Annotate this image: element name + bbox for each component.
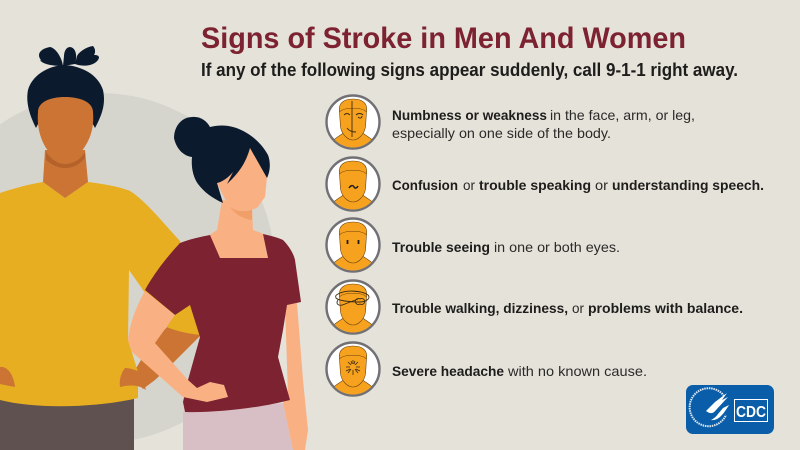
man face	[38, 97, 94, 150]
text: severe headache: with no known cause.	[507, 363, 647, 379]
woman shirt	[145, 234, 301, 412]
text: numbness: in the face, arm, or leg,	[550, 107, 695, 123]
text: confusion: understanding speech.	[612, 177, 764, 193]
icon: confusion	[326, 158, 380, 214]
text: confusion: or	[463, 177, 475, 193]
text: trouble seeing: Trouble seeing	[392, 239, 490, 255]
man neck	[43, 150, 88, 198]
subtitle: If any of the following signs appear suddenly, call 9-1-1 right away.	[201, 60, 738, 80]
text: severe headache: Severe headache	[392, 363, 504, 379]
icon: facial numbness	[326, 96, 380, 152]
woman neck	[208, 200, 268, 262]
illustration: woman	[128, 117, 308, 450]
text: numbness: especially on one side of the body.	[392, 125, 611, 141]
text: trouble seeing: in one or both eyes.	[494, 239, 620, 255]
text: confusion	[392, 177, 764, 193]
man hair	[27, 65, 104, 128]
man hair tufts	[39, 46, 99, 66]
man trousers	[0, 398, 134, 450]
man shirt	[0, 182, 201, 406]
man forearm	[132, 327, 201, 389]
woman hair	[174, 117, 270, 203]
text: trouble walking: problems with balance.	[588, 300, 743, 316]
icon: trouble seeing	[326, 218, 380, 275]
icon: severe headache	[326, 342, 380, 399]
woman neck shadow	[230, 207, 252, 220]
text: numbness	[392, 107, 695, 141]
text: confusion: or	[595, 177, 608, 193]
CDC logo	[686, 385, 774, 434]
woman right arm	[283, 303, 308, 450]
man hand left	[0, 367, 15, 387]
man hand right	[120, 368, 146, 390]
woman face	[217, 148, 267, 212]
title: Signs of Stroke in Men And Women	[201, 22, 686, 55]
man neck shadow	[46, 152, 85, 168]
woman trousers	[183, 403, 293, 450]
icon: dizziness	[326, 280, 380, 337]
text: numbness: Numbness or weakness	[392, 107, 547, 123]
text: trouble walking: or	[572, 300, 584, 316]
text: trouble walking	[392, 300, 743, 316]
background circle	[0, 93, 275, 443]
text: trouble seeing	[392, 239, 620, 255]
woman left arm	[128, 291, 228, 402]
illustration: man	[0, 46, 201, 450]
text: trouble walking: Trouble walking, dizziness,	[392, 300, 568, 316]
CDC logo: CDC	[736, 404, 766, 421]
text: severe headache	[392, 363, 647, 379]
text: confusion: trouble speaking	[479, 177, 591, 193]
text: confusion: Confusion	[392, 177, 458, 193]
